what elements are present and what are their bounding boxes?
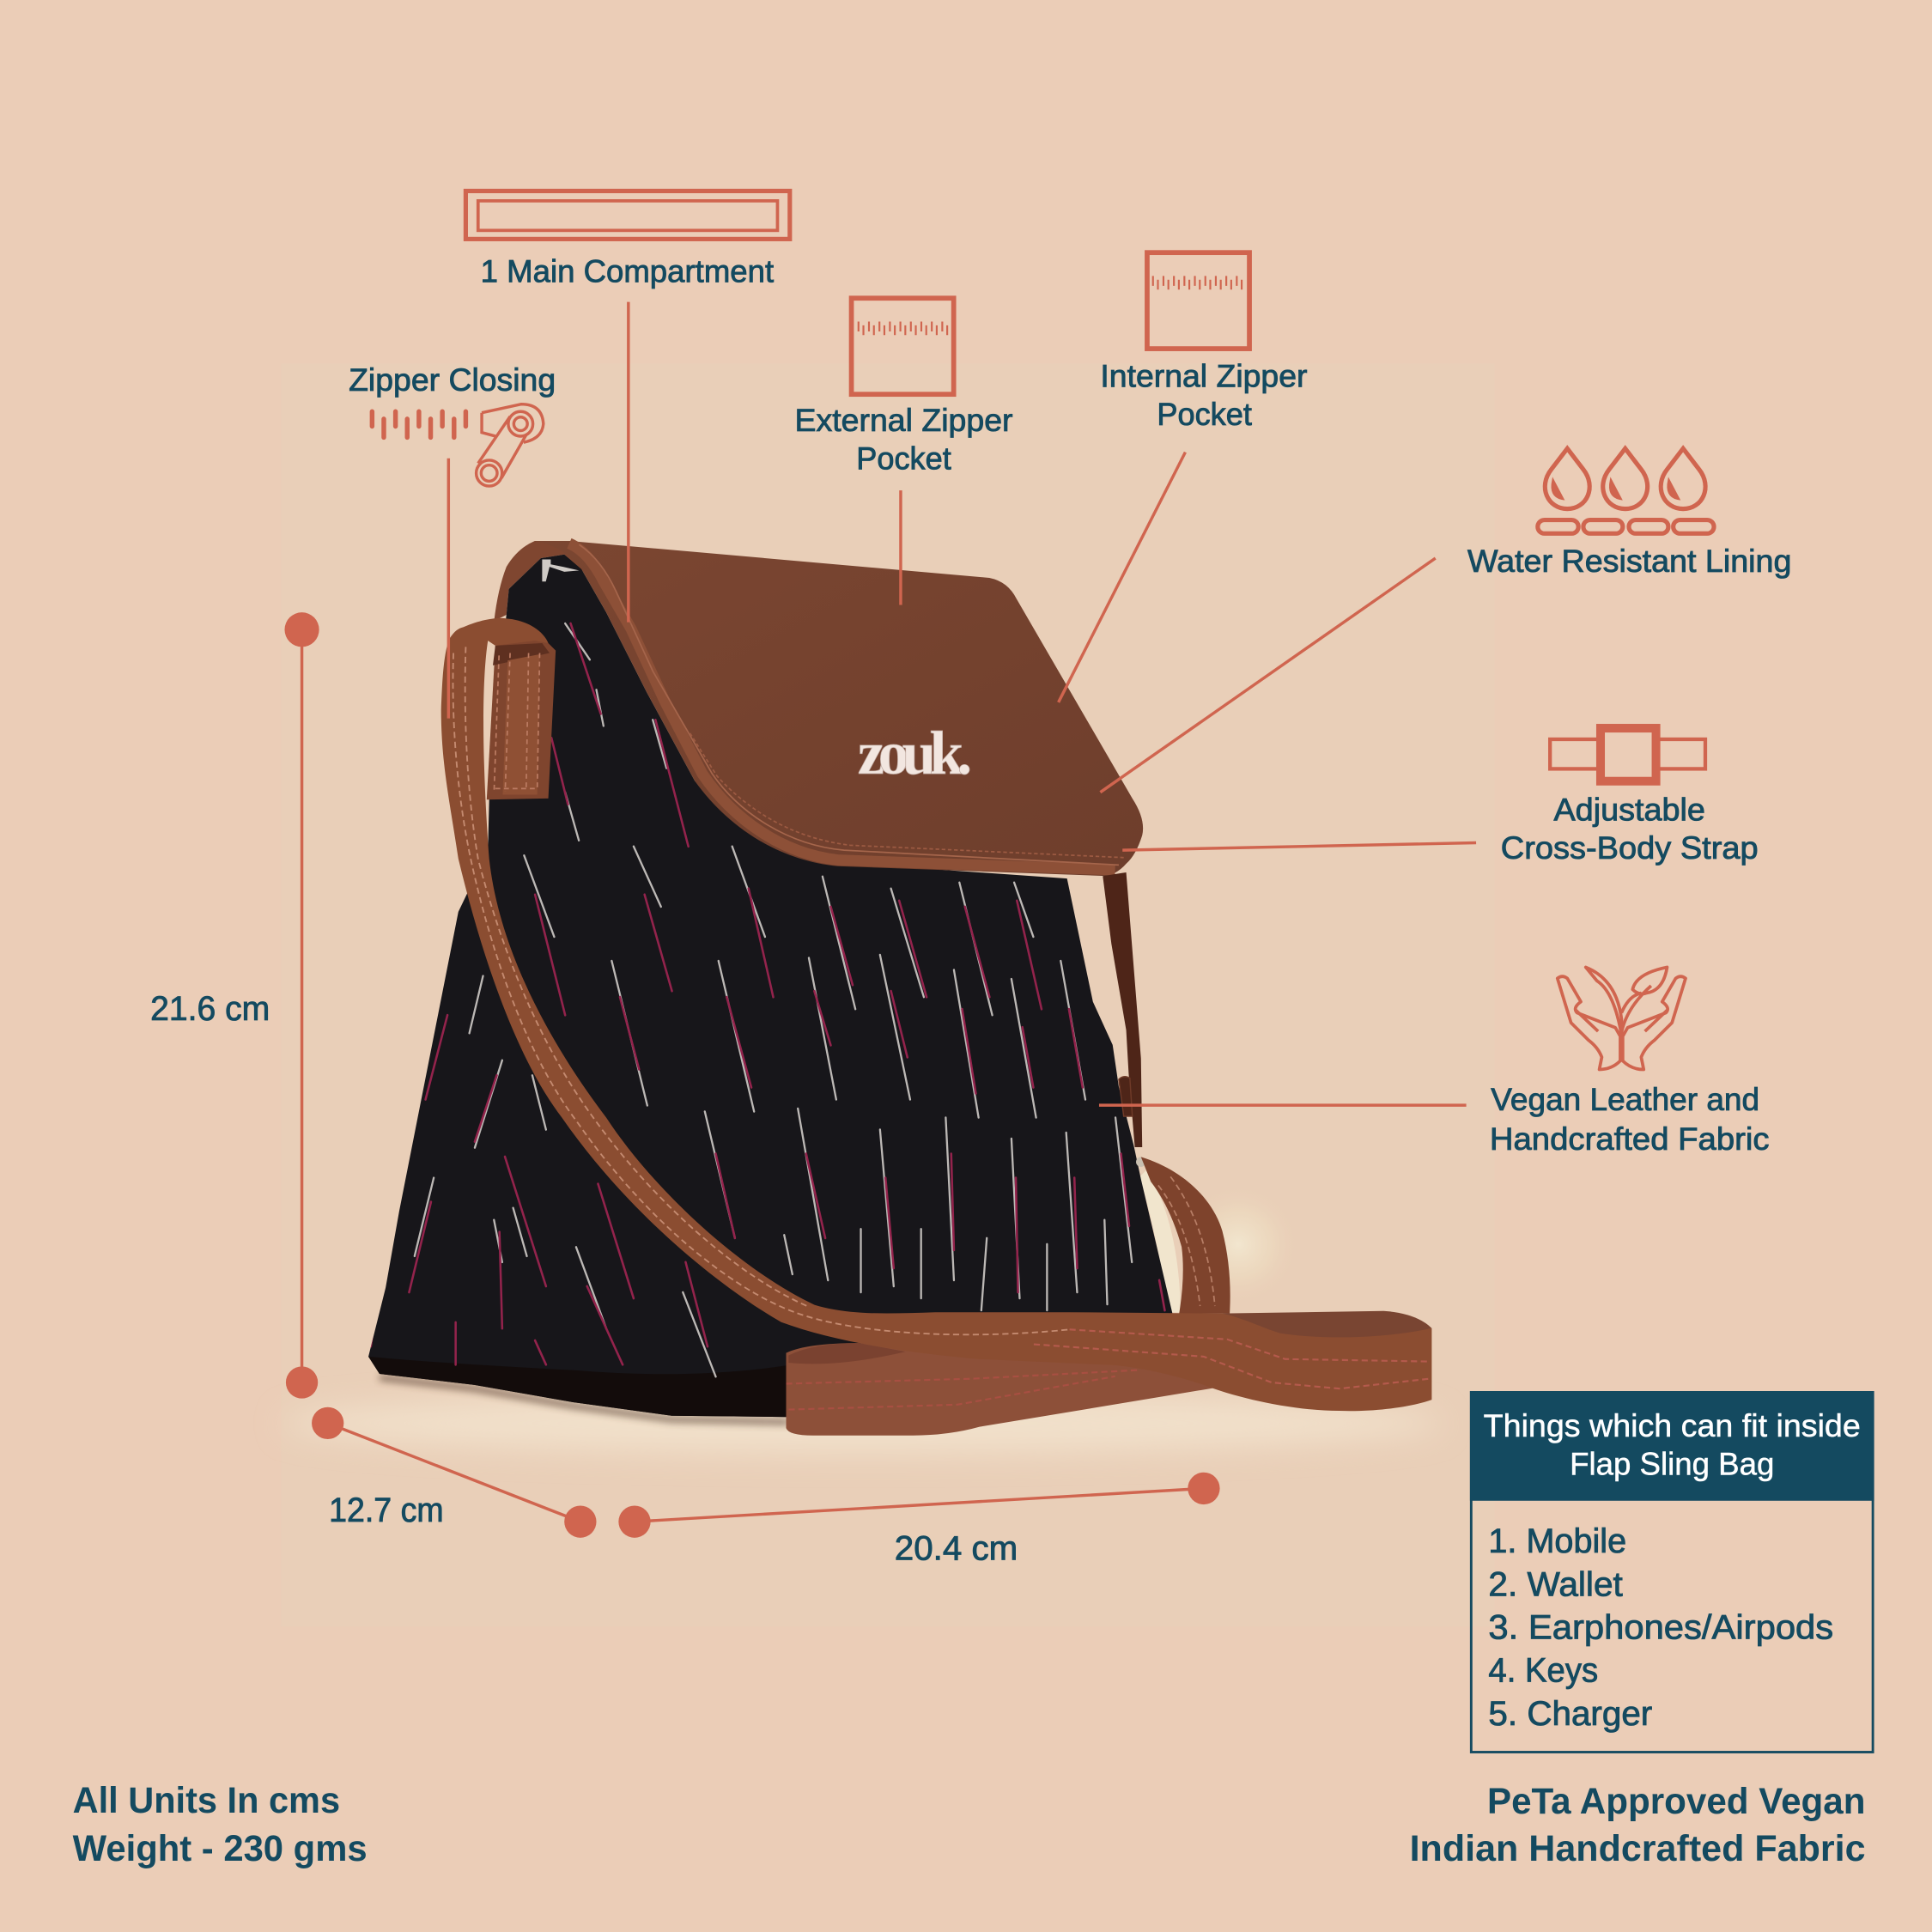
- bag body: [368, 555, 1173, 1417]
- feature: adjustable strap: Cross-Body Strap: [1501, 829, 1759, 866]
- feature: vegan leather: Handcrafted Fabric: [1490, 1121, 1770, 1157]
- back flap edge: [494, 541, 592, 621]
- panel: things which fit inside: [1470, 1391, 1874, 1752]
- dimension: height: [150, 612, 319, 1399]
- feature: internal zipper pocket: Internal Zipper: [1100, 358, 1307, 394]
- footer: vegan approval: Indian Handcrafted Fabric: [1410, 1828, 1866, 1869]
- icon: internal pocket: [1147, 252, 1249, 349]
- flap edge band: [569, 544, 1115, 870]
- feature: vegan leather: [1490, 967, 1770, 1157]
- icon: external pocket: [852, 298, 954, 394]
- feature: internal zipper pocket: [1100, 252, 1307, 432]
- item list: 3. Earphones/Airpods: [1488, 1607, 1833, 1646]
- panel header: Things which can fit inside: [1484, 1407, 1861, 1443]
- feature: internal zipper pocket: Pocket: [1157, 396, 1253, 432]
- feature: water resistant lining: [1467, 448, 1791, 579]
- feature: zipper closing: [349, 361, 556, 486]
- light gap behind right strap: [1139, 1170, 1181, 1312]
- item list: 1. Mobile: [1488, 1522, 1626, 1560]
- feature: zipper closing: Zipper Closing: [349, 361, 556, 398]
- icon: compartment: [465, 191, 790, 239]
- bag base rim: [368, 1357, 788, 1417]
- front flap: [535, 541, 1143, 876]
- feature: adjustable strap: [1501, 728, 1759, 866]
- strap tab: [487, 641, 556, 799]
- icon: hands and leaves: [1558, 967, 1686, 1070]
- item list: [1488, 1522, 1833, 1733]
- footer: vegan approval: [1410, 1781, 1866, 1869]
- dimension: width: [618, 1473, 1220, 1568]
- strap end inner face: [1222, 1311, 1431, 1338]
- dimension: height: 21.6 cm: [150, 989, 270, 1028]
- feature: main compartment: 1 Main Compartment: [481, 253, 775, 289]
- photo backdrop: [281, 363, 1495, 1626]
- panel header: [1470, 1391, 1874, 1501]
- dimension: depth: [312, 1407, 597, 1538]
- connector lines: [448, 302, 1476, 1105]
- item list: 5. Charger: [1488, 1694, 1652, 1733]
- ikat pattern: [371, 623, 1164, 1376]
- feature: vegan leather: Vegan Leather and: [1491, 1081, 1759, 1117]
- feature: main compartment: [465, 191, 790, 289]
- icon: strap buckle: [1550, 728, 1705, 781]
- footer: units and weight: Weight - 230 gms: [73, 1828, 368, 1869]
- icon: zipper pull: [477, 404, 544, 486]
- dimension: depth: 12.7 cm: [329, 1491, 444, 1529]
- main strap: [441, 618, 1431, 1411]
- feature: external zipper pocket: External Zipper: [795, 402, 1013, 438]
- feature: external zipper pocket: Pocket: [856, 440, 951, 477]
- icon: zipper teeth: [372, 411, 465, 437]
- zipper pull hardware: [542, 559, 579, 581]
- icon: drop highlights: [1551, 477, 1680, 501]
- brand logo: zouk.: [858, 719, 972, 787]
- icon: water drops: [1538, 448, 1714, 533]
- footer: units and weight: All Units In cms: [73, 1780, 340, 1821]
- strap stitching: [453, 647, 1070, 1334]
- ground shadow: [380, 1377, 788, 1422]
- right strap: [1103, 872, 1146, 1167]
- feature: external zipper pocket: [795, 298, 1013, 477]
- bag photo: [368, 541, 1431, 1436]
- item list: 2. Wallet: [1488, 1564, 1623, 1603]
- item list: 4. Keys: [1488, 1651, 1598, 1690]
- dimension: width: 20.4 cm: [895, 1529, 1018, 1568]
- lower strap loop: [786, 1343, 1232, 1436]
- panel header: Flap Sling Bag: [1570, 1446, 1774, 1482]
- feature: adjustable strap: Adjustable: [1553, 792, 1705, 828]
- footer: vegan approval: PeTa Approved Vegan: [1487, 1781, 1866, 1822]
- footer: units and weight: [73, 1780, 368, 1869]
- feature: water resistant lining: Water Resistant Lining: [1467, 543, 1791, 579]
- lower right strap loop: [1141, 1157, 1230, 1314]
